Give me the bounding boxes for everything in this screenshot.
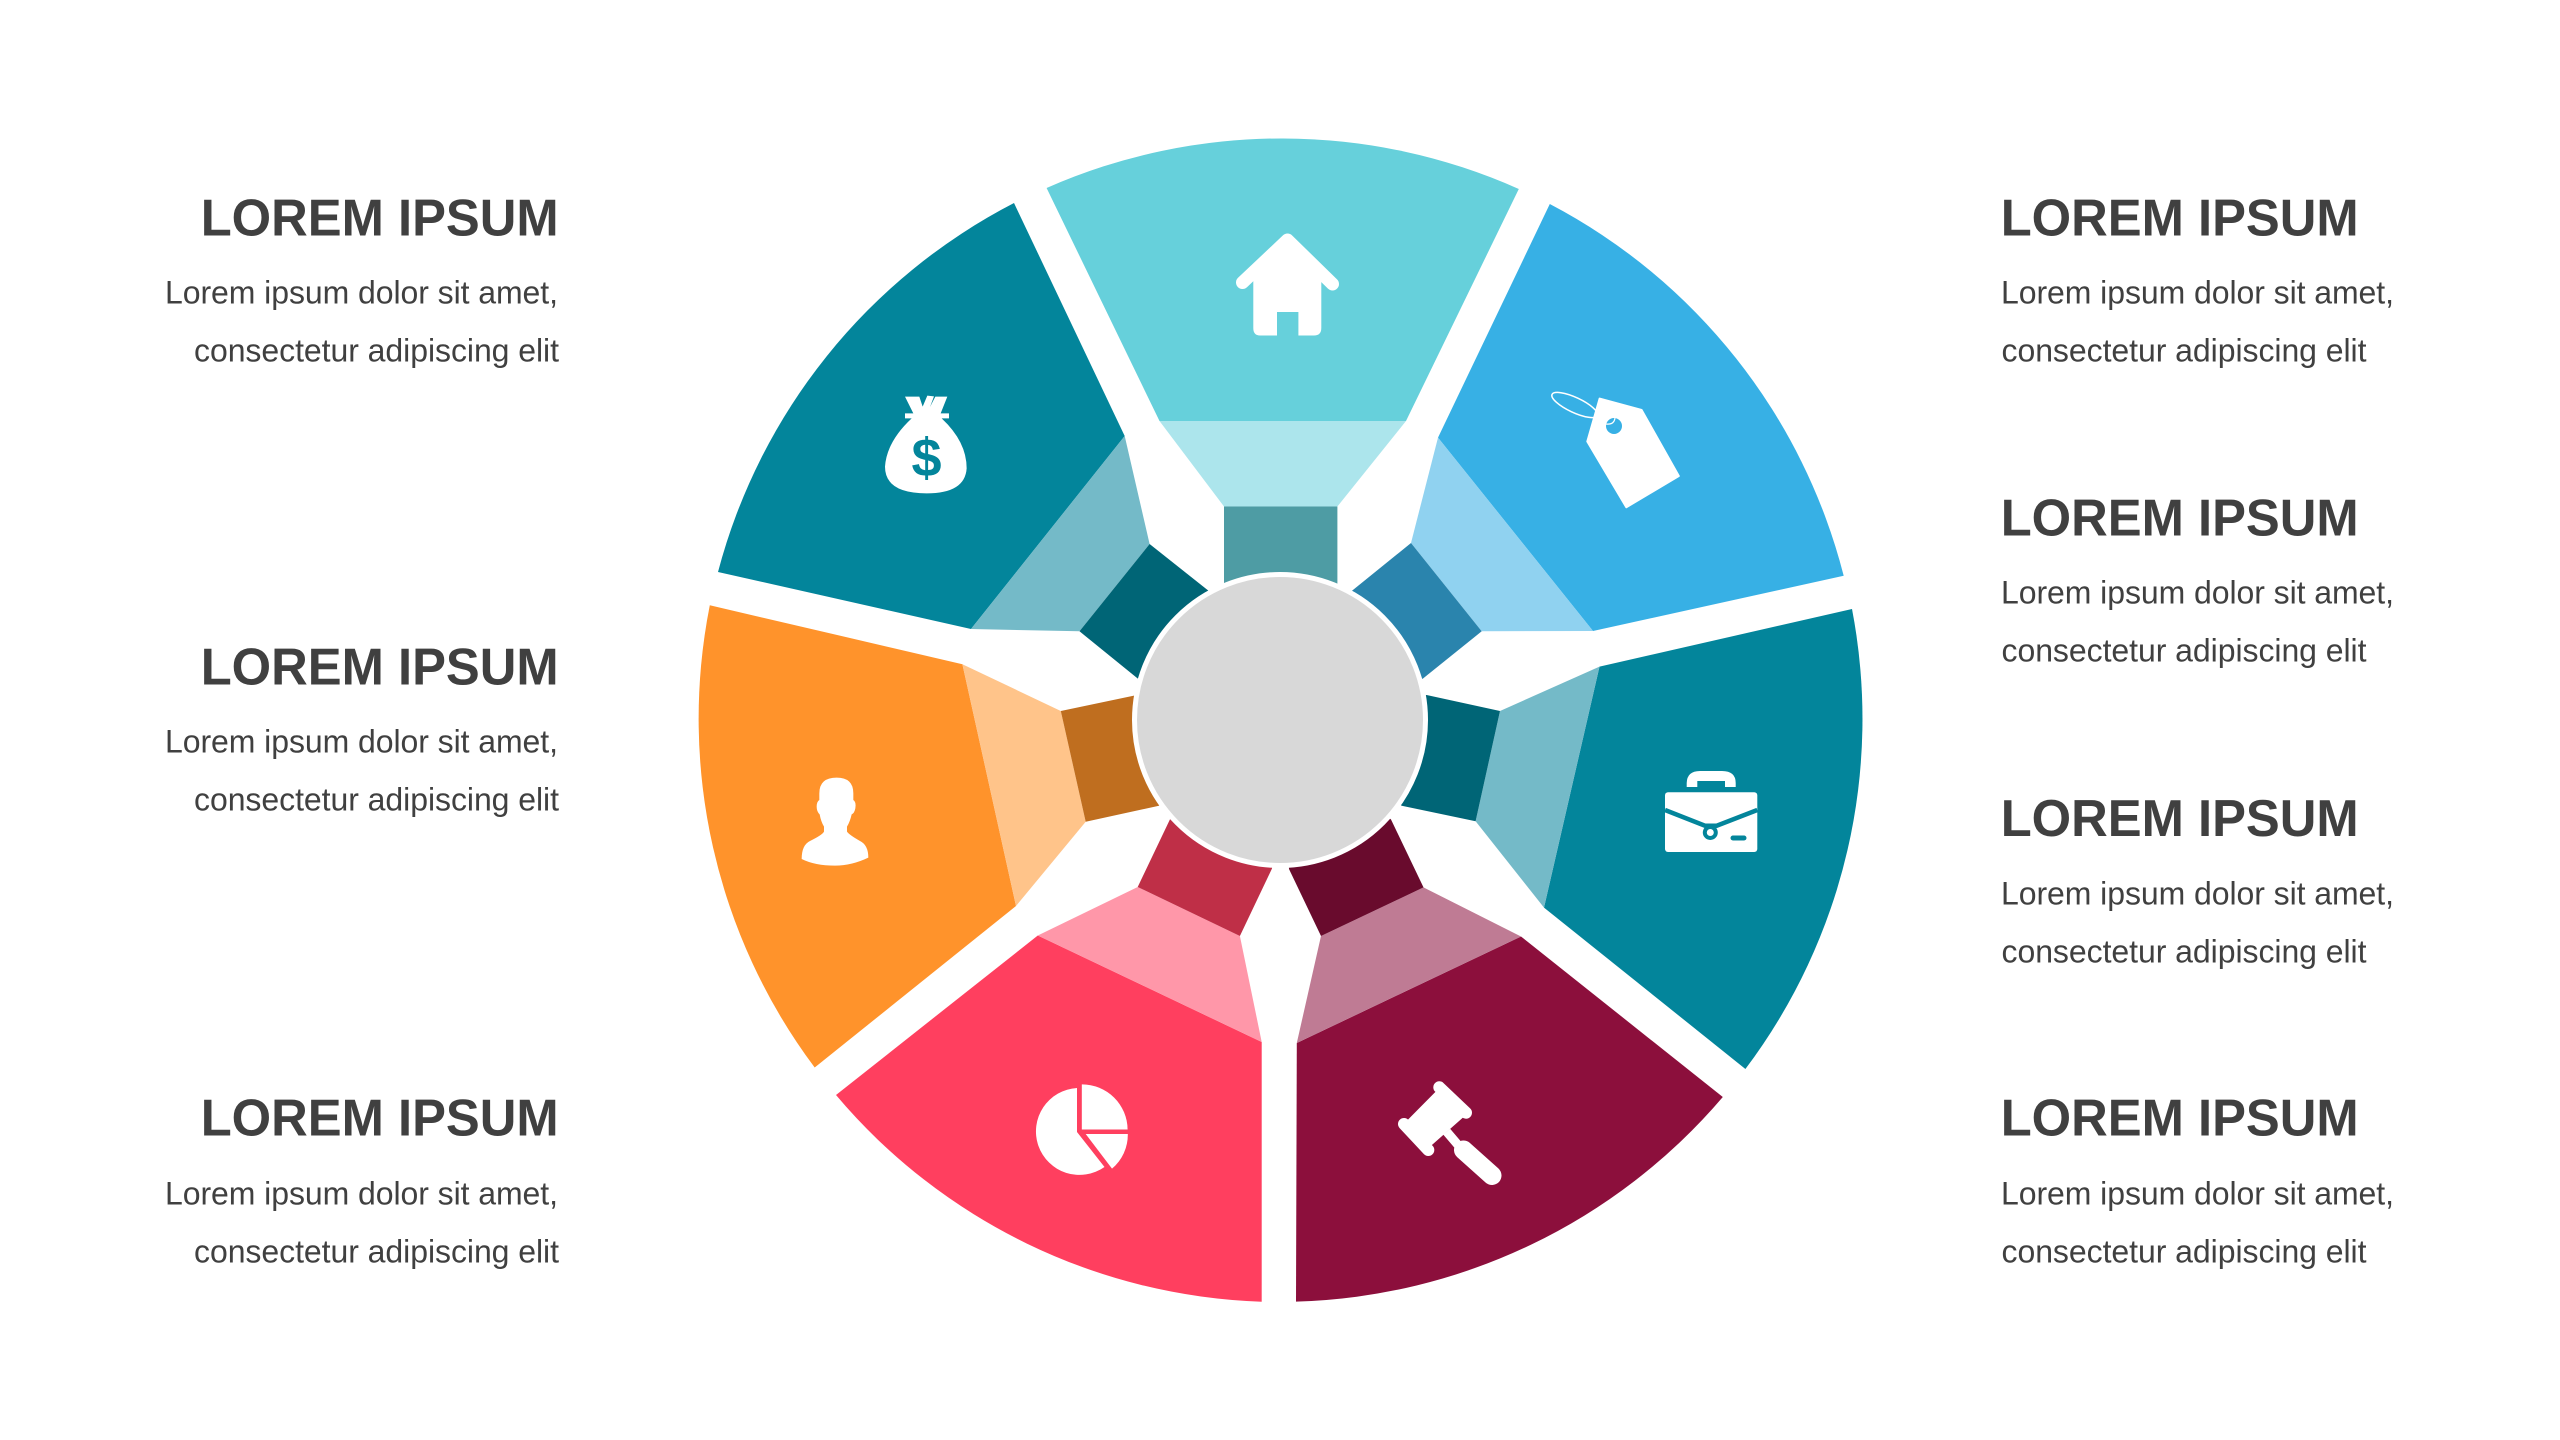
text block: middle left: Lorem ipsum dolor sit amet,: [165, 724, 558, 760]
icon: briefcase: [1665, 771, 1757, 852]
briefcase outer panel: [1544, 609, 1862, 1069]
gavel light connector: [1297, 887, 1521, 1043]
money bag dark connector: [1080, 544, 1280, 720]
person dark connector: [1061, 696, 1280, 822]
text block: right four: LOREM IPSUM: [2001, 1090, 2359, 1148]
briefcase dark connector: [1280, 695, 1500, 821]
icon: money bag: $: [911, 428, 942, 488]
text block: upper left: consectetur adipiscing elit: [194, 332, 559, 368]
segment: tag (upper right): [1280, 204, 1844, 720]
text block: right four: Lorem ipsum dolor sit amet,: [2001, 1176, 2394, 1212]
money bag light connector: [971, 436, 1150, 631]
pie light connector: [1038, 887, 1262, 1042]
text block: right three: Lorem ipsum dolor sit amet,: [2001, 876, 2394, 912]
person outer panel: [699, 605, 1016, 1068]
icon: money bag: [885, 396, 967, 493]
tag outer panel: [1438, 204, 1844, 631]
text block: right two: consectetur adipiscing elit: [2002, 632, 2367, 668]
gavel dark connector: [1280, 720, 1424, 936]
tag light connector: [1411, 438, 1593, 631]
text block: right one: LOREM IPSUM: [2001, 190, 2359, 248]
segment: gavel (lower right): [1280, 720, 1723, 1302]
text block: middle left: consectetur adipiscing elit: [194, 781, 559, 817]
pie dark connector: [1138, 720, 1280, 936]
gavel outer panel: [1296, 936, 1723, 1302]
icon: person: [802, 778, 868, 866]
text block: right four: [2001, 1090, 2394, 1269]
wheel diagram: [699, 138, 1862, 1302]
segment: briefcase (right): [1280, 609, 1862, 1069]
money bag outer panel: [718, 203, 1125, 629]
segment: pie chart (lower left): [836, 720, 1280, 1302]
icon: gavel: [1404, 1087, 1492, 1176]
tag dark connector: [1280, 543, 1482, 720]
person light connector: [962, 664, 1086, 906]
icon: price tag: [1549, 388, 1679, 507]
text block: middle left: LOREM IPSUM: [201, 639, 559, 697]
text block: right two: LOREM IPSUM: [2001, 490, 2359, 548]
text block: right one: [2001, 190, 2394, 368]
text block: right one: consectetur adipiscing elit: [2002, 332, 2367, 368]
text block: right three: [2001, 790, 2394, 970]
text block: right three: consectetur adipiscing elit: [2002, 934, 2367, 970]
text block: lower left: consectetur adipiscing elit: [194, 1233, 559, 1269]
text block: lower left: [165, 1090, 559, 1269]
home light connector: [1160, 421, 1406, 506]
text block: right two: [2001, 490, 2394, 668]
text block: upper left: Lorem ipsum dolor sit amet,: [165, 274, 558, 310]
segment: person (left): [699, 605, 1280, 1068]
text block: upper left: LOREM IPSUM: [201, 190, 559, 248]
text block: upper left: [165, 190, 559, 368]
text block: right four: consectetur adipiscing elit: [2002, 1233, 2367, 1269]
segment: money bag (upper left): [718, 203, 1280, 720]
text block: lower left: LOREM IPSUM: [201, 1090, 559, 1148]
home dark connector: [1224, 506, 1337, 640]
text block: lower left: Lorem ipsum dolor sit amet,: [165, 1176, 558, 1212]
icon: pie chart: [1036, 1084, 1128, 1175]
text block: middle left: [165, 639, 559, 817]
home outer panel: [1047, 138, 1519, 421]
briefcase light connector: [1476, 667, 1600, 908]
text block: right two: Lorem ipsum dolor sit amet,: [2001, 574, 2394, 610]
text block: right three: LOREM IPSUM: [2001, 790, 2359, 848]
center hub: [1134, 574, 1426, 866]
text block: right one: Lorem ipsum dolor sit amet,: [2001, 274, 2394, 310]
icon: house: [1242, 240, 1332, 336]
pie outer panel: [836, 936, 1262, 1302]
segment: home (top): [1047, 138, 1519, 640]
